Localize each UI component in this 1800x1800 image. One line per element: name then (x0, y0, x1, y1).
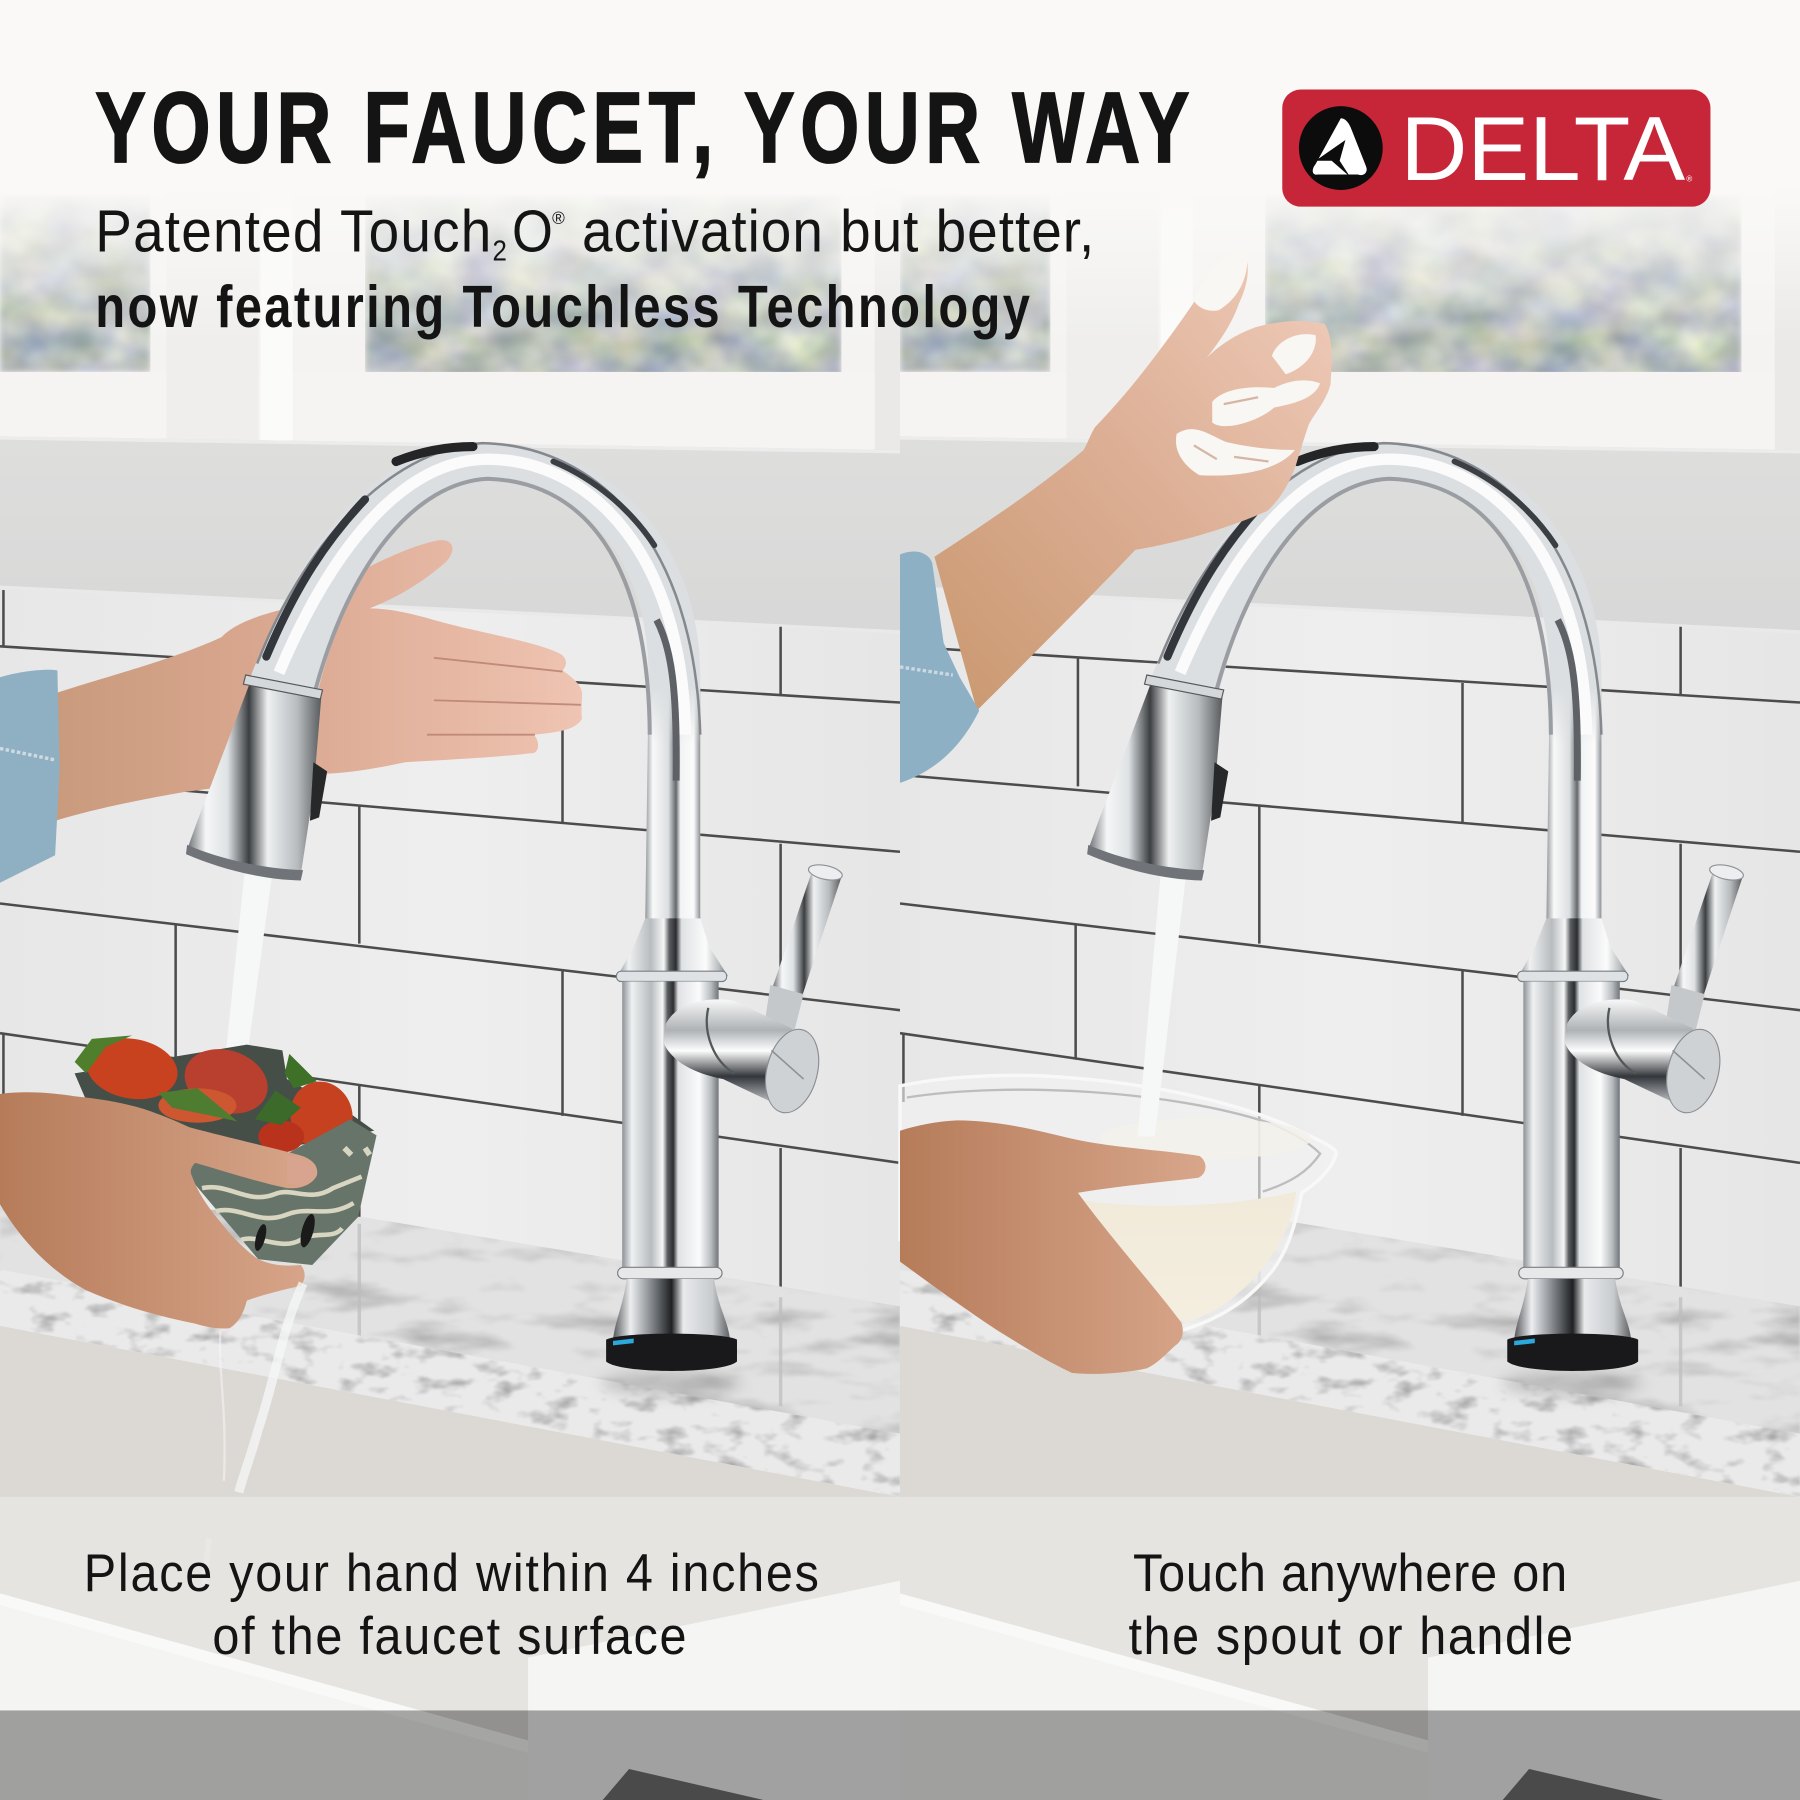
panel: left scene background (0, 0, 900, 1800)
colander rim and handle (75, 1045, 374, 1165)
water stream left (226, 872, 272, 1050)
strawberries and colander (75, 1031, 377, 1265)
caption right (1128, 1543, 1573, 1666)
caption right: the spout or handle (1128, 1606, 1573, 1666)
faucet left (186, 442, 844, 1396)
bowl body (900, 1075, 1336, 1330)
header white fade (0, 0, 1800, 344)
logo: Delta: ® (1686, 174, 1692, 183)
milky water (1078, 1192, 1296, 1322)
right hand holding bowl (900, 1120, 1206, 1374)
dripping water left (204, 1283, 303, 1584)
subtitle line one (95, 197, 1094, 267)
panel: right scene background (900, 0, 1800, 1800)
right glass bowl (900, 1075, 1336, 1330)
caption left: of the faucet surface (212, 1606, 687, 1666)
faucet right (1087, 442, 1745, 1396)
colander body (184, 1119, 377, 1265)
water stream right (1138, 875, 1186, 1136)
caption left (84, 1543, 819, 1666)
caption left: Place your hand within 4 inches (84, 1543, 819, 1603)
right hand touching the spout (900, 247, 1332, 783)
subtitle line two: now featuring Touchless Technology (95, 274, 1031, 340)
caption right: Touch anywhere on (1133, 1543, 1567, 1603)
right arm and hand (934, 251, 1332, 711)
left hand reaching behind the faucet (0, 540, 582, 883)
shaving foam on fingers (1176, 247, 1320, 476)
right denim sleeve (900, 551, 979, 783)
subtitle line one: ® (552, 208, 565, 228)
left arm and open hand (52, 540, 582, 822)
subtitle line one: Patented Touch (95, 198, 491, 265)
icon: Delta emblem (1299, 106, 1383, 190)
logo: Delta (1282, 90, 1710, 207)
subtitle line one: 2 (492, 234, 507, 267)
strawberries (75, 1031, 360, 1157)
subtitle line one: activation but better, (582, 198, 1094, 265)
subtitle line one: O (512, 197, 553, 264)
title: YOUR FAUCET, YOUR WAY (95, 72, 1189, 183)
left hand holding colander (0, 1092, 317, 1328)
left denim sleeve (0, 670, 60, 883)
logo wordmark: DELTA (1401, 99, 1686, 200)
